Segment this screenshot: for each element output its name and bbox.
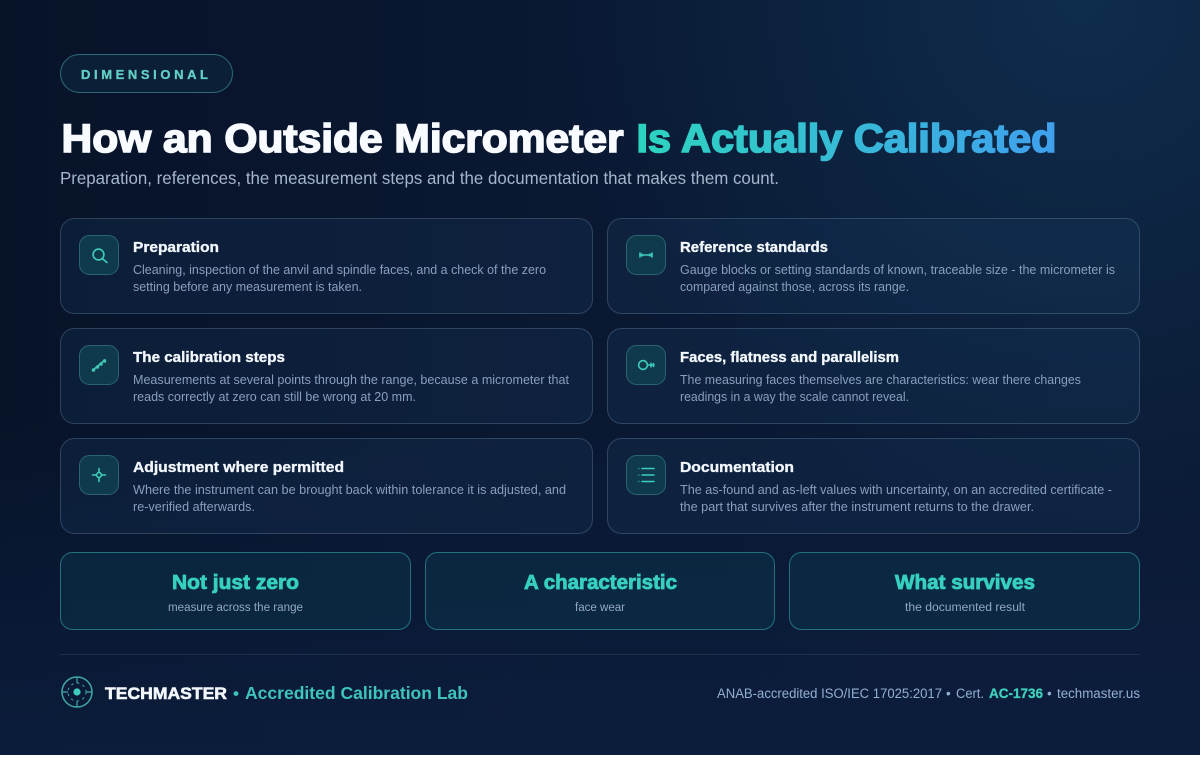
footer brand: Accredited Calibration Lab bbox=[245, 683, 468, 703]
text: faces, flatness and parallelism: The measuring faces themselves are characteristics: wear there changes bbox=[680, 373, 1081, 387]
icon: techmaster logo bbox=[62, 677, 92, 707]
heading: preparation: Preparation bbox=[133, 239, 219, 256]
text: faces, flatness and parallelism bbox=[680, 373, 1081, 404]
stat: a characteristic: face wear bbox=[575, 602, 625, 614]
text: reference standards bbox=[680, 263, 1115, 294]
heading: faces, flatness and parallelism: Faces, flatness and parallelism bbox=[680, 349, 899, 366]
text: reference standards: Gauge blocks or setting standards of known, traceable size - the micrometer is bbox=[680, 263, 1115, 277]
stat: not just zero: measure across the range bbox=[168, 602, 303, 614]
text: adjustment where permitted bbox=[133, 483, 566, 514]
panel: faces, flatness and parallelism bbox=[608, 328, 1140, 424]
subtitle: Preparation, references, the measurement steps and the documentation that makes them count. bbox=[60, 168, 779, 188]
stat: what survives: What survives bbox=[895, 572, 1035, 594]
icon: key-like gauge bbox=[626, 346, 666, 384]
text: preparation: Cleaning, inspection of the anvil and spindle faces, and a check of the zero bbox=[133, 263, 546, 277]
title: Is Actually Calibrated bbox=[636, 117, 1056, 161]
footer accreditation: Cert. bbox=[956, 686, 984, 701]
text: calibration steps: Measurements at several points through the range, because a micrometer that bbox=[133, 373, 570, 387]
footer accreditation: • bbox=[946, 686, 951, 701]
text: calibration steps bbox=[133, 373, 570, 404]
title: How an Outside Micrometer bbox=[62, 117, 624, 161]
icon: crosshair bbox=[80, 456, 118, 494]
badge: dimensional bbox=[60, 54, 232, 92]
footer brand bbox=[62, 677, 468, 707]
title bbox=[62, 117, 1056, 161]
panel: adjustment where permitted bbox=[60, 438, 592, 534]
stat: what survives: the documented result bbox=[905, 602, 1026, 614]
footer accreditation: AC-1736 bbox=[989, 686, 1043, 701]
footer accreditation: • bbox=[1047, 686, 1052, 701]
panel: calibration steps bbox=[60, 328, 592, 424]
footer accreditation: techmaster.us bbox=[1057, 686, 1140, 701]
footer accreditation: ANAB-accredited ISO/IEC 17025:2017 bbox=[717, 686, 942, 701]
footer accreditation bbox=[717, 686, 1140, 701]
heading: reference standards: Reference standards bbox=[680, 239, 828, 256]
stat: what survives bbox=[790, 552, 1140, 630]
text: calibration steps: reads correctly at zero can still be wrong at 20 mm. bbox=[133, 390, 416, 404]
icon: list bbox=[626, 456, 666, 494]
text: preparation: setting before any measurement is taken. bbox=[133, 280, 362, 294]
panel: preparation bbox=[60, 218, 592, 314]
stat: a characteristic bbox=[426, 552, 774, 630]
text: documentation: The as-found and as-left values with uncertainty, on an accredited certificate - bbox=[680, 483, 1112, 497]
footer brand: TECHMASTER bbox=[105, 684, 227, 703]
stat: not just zero: Not just zero bbox=[172, 572, 299, 594]
text: adjustment where permitted: re-verified afterwards. bbox=[133, 500, 255, 514]
text: preparation bbox=[133, 263, 546, 294]
heading: adjustment where permitted: Adjustment where permitted bbox=[133, 459, 344, 476]
footer brand: • bbox=[233, 684, 239, 703]
badge: dimensional: DIMENSIONAL bbox=[81, 67, 212, 82]
text: adjustment where permitted: Where the instrument can be brought back within tolerance it is adjusted, and bbox=[133, 483, 566, 497]
icon: magnifier bbox=[80, 236, 118, 274]
heading: calibration steps: The calibration steps bbox=[133, 349, 285, 366]
icon: double arrow bbox=[626, 236, 666, 274]
text: documentation bbox=[680, 483, 1112, 514]
stat: a characteristic: A characteristic bbox=[524, 572, 677, 594]
text: reference standards: compared against those, across its range. bbox=[680, 280, 909, 294]
panel: documentation bbox=[608, 438, 1140, 534]
panel: reference standards bbox=[608, 218, 1140, 314]
text: faces, flatness and parallelism: readings in a way the scale cannot reveal. bbox=[680, 390, 909, 404]
icon: rising points bbox=[80, 346, 118, 384]
heading: documentation: Documentation bbox=[680, 459, 794, 476]
stat: not just zero bbox=[60, 552, 410, 630]
text: documentation: the part that survives after the instrument returns to the drawer. bbox=[680, 500, 1034, 514]
